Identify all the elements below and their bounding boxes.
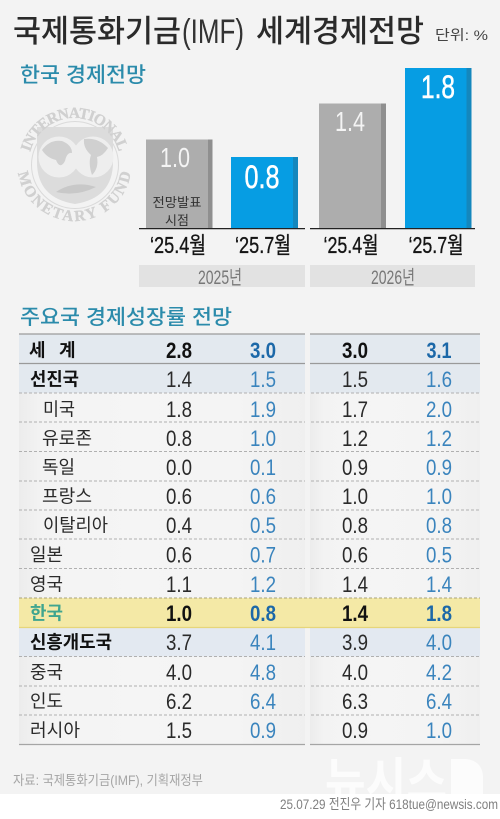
bar: 2025 April: 1.0: [160, 142, 190, 173]
row: Eurozone: 1.0: [250, 426, 276, 451]
row: UK: 1.4: [342, 572, 368, 597]
bar: 2026 July: 1.8: [421, 69, 455, 105]
bar: 2025 July: [231, 157, 298, 228]
row: Korea highlighted: 0.8: [250, 601, 276, 626]
row: France: [42, 484, 452, 509]
bar chart: [139, 68, 475, 289]
row: world: 세: [29, 340, 46, 360]
row: India: 인도: [30, 692, 63, 712]
row: UK: 1.1: [166, 572, 192, 597]
row: Russia: [30, 718, 452, 743]
row: world: [29, 338, 452, 363]
row: advanced economies: 1.5: [250, 367, 276, 392]
row: world: 계: [59, 340, 76, 360]
row: Germany: 0.0: [166, 455, 192, 480]
icon: IMF seal: MONETARY FUND: [18, 170, 130, 222]
axis labels: ‘25.7월: [408, 232, 464, 258]
row: Germany: 0.9: [426, 455, 452, 480]
row: China: [30, 660, 452, 685]
title: (IMF): [182, 13, 244, 51]
row: Korea highlighted: 1.4: [342, 601, 368, 626]
title: 세계경제전망: [256, 14, 424, 49]
row: advanced economies: 1.4: [166, 367, 192, 392]
row: Japan: 0.6: [342, 542, 368, 568]
row: India: 6.4: [426, 689, 452, 714]
source note: 자료: 국제통화기금(IMF), 기획재정부: [13, 773, 203, 788]
bar: 2026 April: [319, 104, 386, 228]
row: India: [30, 689, 452, 714]
year band: 2025: 2025년: [198, 267, 242, 289]
row: France: 0.6: [250, 484, 276, 509]
bar: 2026 April: 1.4: [335, 106, 365, 137]
row: Korea highlighted: 한국: [30, 604, 63, 624]
row: USA: 1.8: [166, 397, 192, 422]
axis labels: [150, 232, 464, 258]
row: France: 0.6: [166, 484, 192, 509]
row: Eurozone: 1.2: [342, 426, 368, 451]
icon: IMF seal: [18, 108, 130, 222]
row: USA: 2.0: [426, 397, 452, 422]
row: China: 4.2: [426, 660, 452, 685]
row: UK: 영국: [30, 574, 63, 594]
row: USA: 미국: [43, 400, 75, 420]
axis labels: ‘25.4월: [150, 232, 206, 258]
title: [13, 13, 424, 51]
row: India: 6.4: [250, 689, 276, 714]
icon: IMF seal: INTERNATIONAL: [20, 108, 127, 152]
axis labels: ‘25.4월: [324, 232, 378, 258]
row: emerging economies: 3.7: [166, 630, 192, 655]
title: 국제통화기금: [13, 14, 181, 49]
row: Italy: 0.8: [426, 513, 452, 538]
row: emerging economies: [30, 630, 452, 655]
row: Russia: 1.0: [426, 718, 452, 743]
row: Russia: 0.9: [342, 718, 368, 743]
row: Japan: [30, 542, 452, 568]
row: Italy: 0.5: [250, 513, 276, 538]
row: Italy: [43, 513, 452, 538]
row: advanced economies: 1.6: [426, 367, 452, 392]
row: Japan: 0.6: [166, 542, 192, 568]
axis labels: ‘25.7월: [235, 232, 291, 258]
row: world: 3.0: [342, 338, 368, 363]
row: France: 1.0: [426, 484, 452, 509]
row: emerging economies: 신흥개도국: [30, 632, 112, 652]
row: Eurozone: [42, 426, 452, 451]
row: Japan: 0.7: [250, 542, 276, 568]
row: Korea highlighted: 1.0: [166, 601, 192, 626]
row: advanced economies: 선진국: [30, 370, 79, 390]
row: Japan: 일본: [30, 545, 63, 565]
table: [19, 334, 480, 744]
row: Italy: 0.4: [166, 513, 192, 538]
row: Russia: 러시아: [30, 720, 80, 740]
row: China: 4.8: [250, 660, 276, 685]
heading: major economies growth: 주요국 경제성장률 전망: [20, 306, 232, 329]
watermark: Newsis logo: [327, 757, 483, 794]
row: Italy: 이탈리아: [43, 516, 108, 536]
row: Eurozone: 유로존: [42, 428, 92, 448]
row: advanced economies: 1.5: [342, 367, 368, 392]
row: USA: 1.9: [250, 397, 276, 422]
row: advanced economies: [30, 367, 452, 392]
bar: 2025 April: [146, 140, 212, 228]
row: USA: 1.7: [342, 397, 368, 422]
row: UK: 1.4: [426, 572, 452, 597]
row: Russia: 1.5: [166, 718, 192, 743]
row: China: 중국: [30, 662, 63, 682]
row: India: 6.2: [166, 689, 192, 714]
row: Germany: [42, 455, 452, 480]
row: Eurozone: 0.8: [166, 426, 192, 451]
row: Japan: 0.5: [426, 542, 452, 568]
row: UK: 1.2: [250, 572, 276, 597]
bar: 2026 July: [405, 68, 472, 228]
year band: 2025: [139, 265, 305, 289]
row: Germany: 0.1: [250, 455, 276, 480]
bar: 2025 July: 0.8: [244, 159, 280, 195]
year band: 2026: 2026년: [371, 267, 415, 289]
row: Korea highlighted: [19, 598, 480, 628]
row: USA: [43, 397, 452, 422]
row: world: 3.0: [250, 338, 276, 363]
row: Germany: 독일: [42, 458, 75, 478]
row: emerging economies: 4.1: [250, 630, 276, 655]
bar: 2025 April: 시점: [165, 213, 189, 228]
watermark: Newsis logo: 뉴시스: [325, 754, 447, 810]
row: Germany: 0.9: [342, 455, 368, 480]
bar: 2025 April: 전망발표: [152, 195, 202, 210]
row: Eurozone: 1.2: [426, 426, 452, 451]
row: UK: [30, 572, 452, 597]
year band: 2026: [310, 265, 475, 289]
row: China: 4.0: [342, 660, 368, 685]
row: India: 6.3: [342, 689, 368, 714]
row: world: 3.1: [426, 338, 452, 363]
row: emerging economies: 3.9: [342, 630, 368, 655]
row: Korea highlighted: 1.8: [426, 601, 452, 626]
row: France: 프랑스: [42, 486, 92, 506]
row: world: 2.8: [166, 338, 192, 363]
row: Italy: 0.8: [342, 513, 368, 538]
row: emerging economies: 4.0: [426, 630, 452, 655]
heading: Korea outlook: 한국 경제전망: [20, 64, 146, 87]
row: China: 4.0: [166, 660, 192, 685]
unit label: 단위: %: [435, 27, 488, 43]
row: France: 1.0: [342, 484, 368, 509]
row: Russia: 0.9: [250, 718, 276, 743]
